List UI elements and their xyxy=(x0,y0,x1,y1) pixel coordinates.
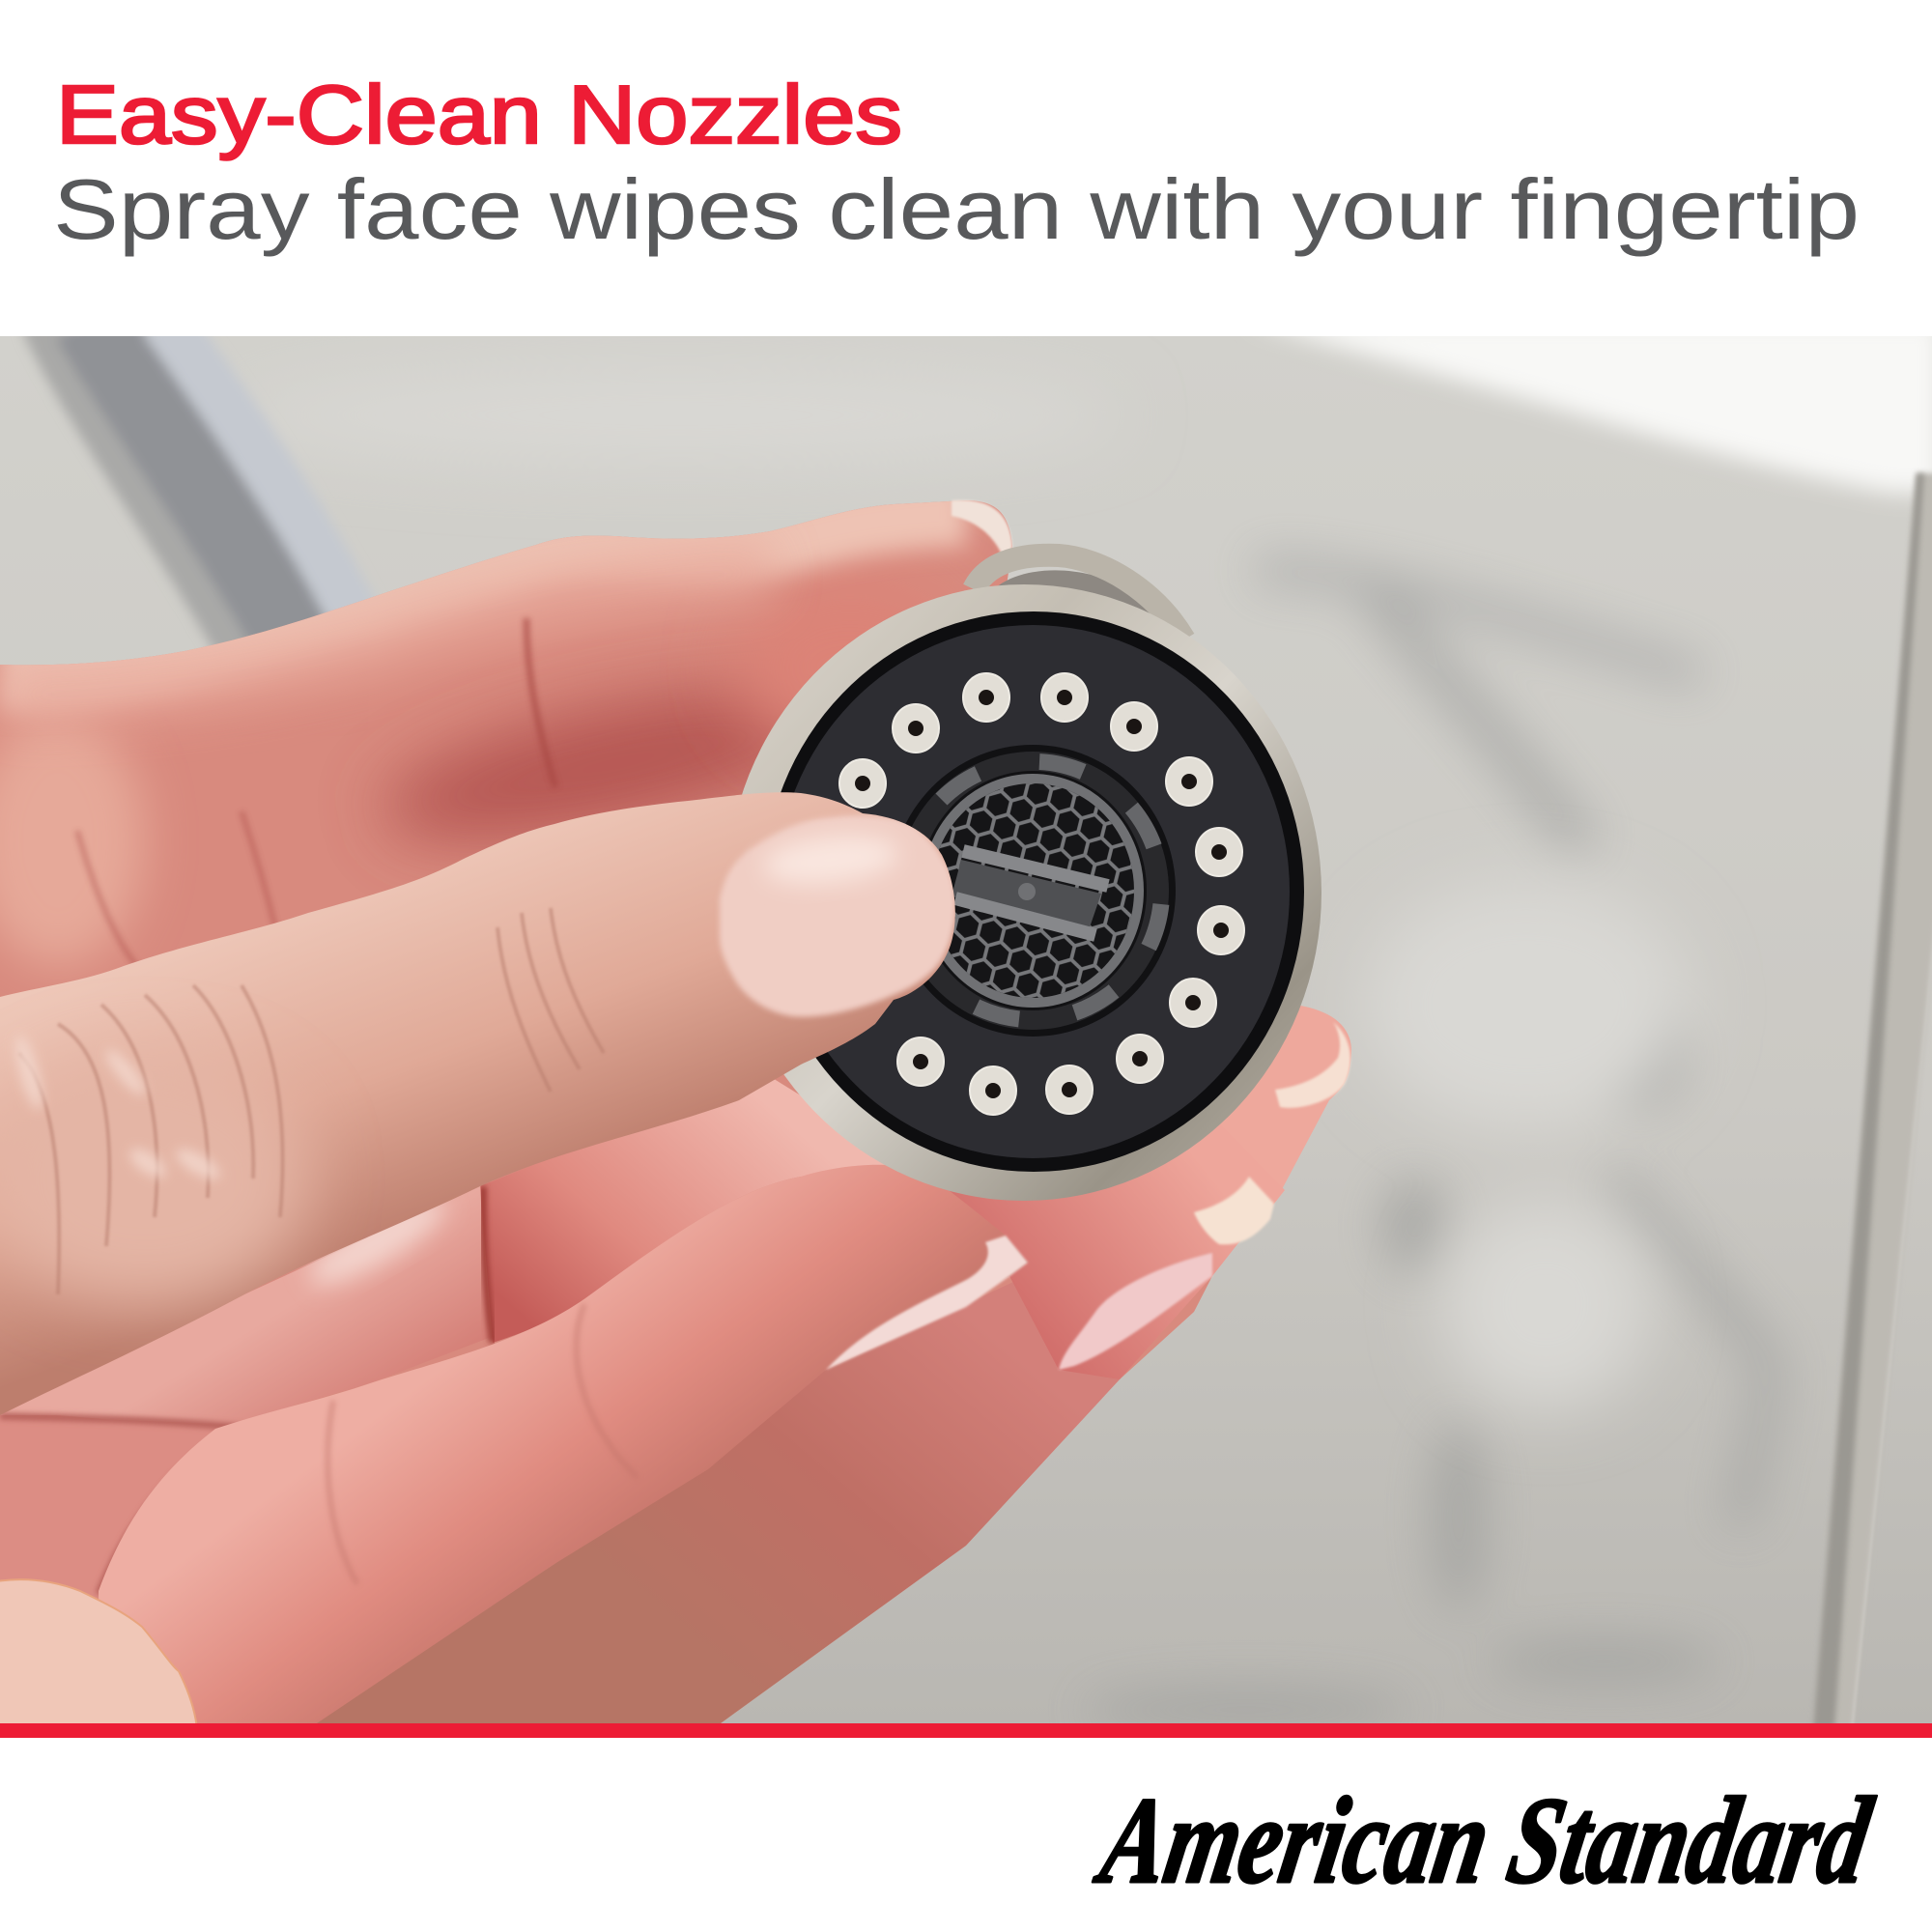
lower left thumb pad xyxy=(0,1579,197,1729)
finger creases xyxy=(77,618,555,985)
middle finger nail xyxy=(826,1236,1028,1370)
rear metal loop xyxy=(976,570,1183,647)
knuckle wrinkles xyxy=(19,908,604,1294)
nail highlight xyxy=(761,830,900,890)
crease between fingers xyxy=(483,1186,493,1343)
finger behind thumb, right of crease xyxy=(480,1080,885,1343)
finger behind thumb, left of crease xyxy=(0,1186,489,1429)
thumb nail xyxy=(720,815,955,1017)
back of hand and index finger xyxy=(0,483,1352,1739)
brushed metal outer ring xyxy=(726,584,1321,1201)
highlight on finger behind thumb xyxy=(299,1202,450,1293)
rear finger with nail, right of nozzle xyxy=(1212,1005,1351,1193)
middle finger xyxy=(99,1165,1028,1729)
red divider bar xyxy=(0,1723,1932,1738)
nozzle holes xyxy=(855,690,1229,1098)
title: Easy-Clean Nozzles xyxy=(56,70,902,161)
centre aerator channel xyxy=(890,745,1176,1037)
pointing thumb xyxy=(0,773,985,1430)
ring finger nail and pale tip xyxy=(1059,1177,1274,1370)
knuckle highlights xyxy=(10,1033,225,1185)
cabinet panel and vertical faucet stripe, right xyxy=(1813,473,1932,1729)
flexible hose, top left xyxy=(43,319,355,667)
subtitle: Spray face wipes clean with your fingertip xyxy=(53,161,1860,257)
grey inner ring xyxy=(919,771,1147,1010)
pink base of ring finger xyxy=(949,1130,1285,1379)
honeycomb mesh xyxy=(931,783,1134,998)
spray nozzles ring xyxy=(839,673,1244,1115)
white counter edge, top right xyxy=(1246,319,1932,493)
aerator tabs xyxy=(940,760,1163,1021)
dark palm under middle finger xyxy=(308,1275,1121,1723)
nozzle xyxy=(726,555,1321,1201)
index finger shading xyxy=(0,512,966,966)
centre bars xyxy=(952,851,1108,935)
finger joints xyxy=(327,1304,638,1584)
lower left finger xyxy=(0,1415,246,1723)
photo panel: hand holding nozzle xyxy=(0,319,1932,1739)
black spray face xyxy=(763,611,1304,1172)
blurred marble countertop background xyxy=(0,336,1932,1733)
thumb knuckle tint xyxy=(0,1053,309,1304)
index fingernail tip xyxy=(952,500,1012,570)
